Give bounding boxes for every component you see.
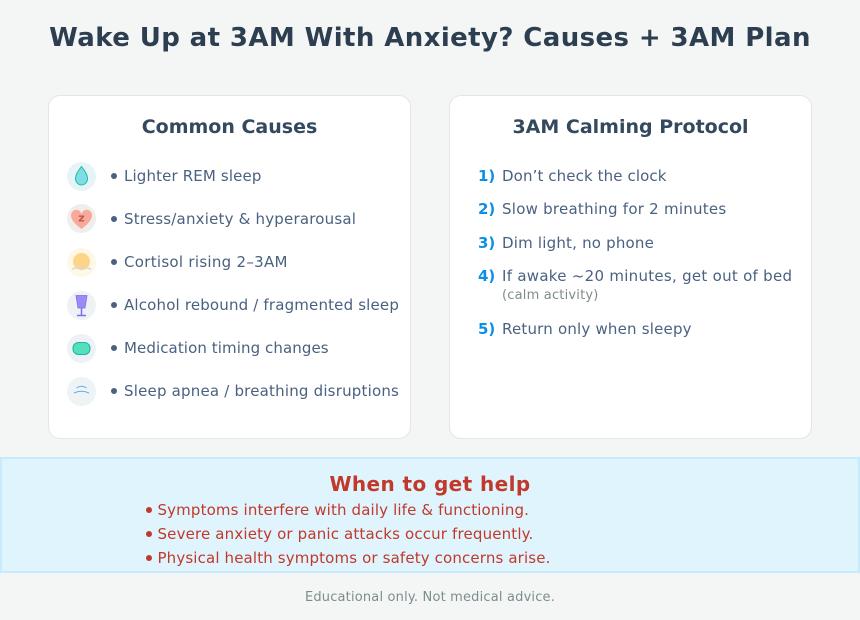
icon: water drop: [67, 162, 96, 191]
icon: wine glass: [67, 291, 96, 320]
cause: medication: Medication timing changes: [124, 339, 329, 357]
heading: calming protocol: 3AM Calming Protocol: [512, 116, 749, 138]
heading: common causes: Common Causes: [142, 116, 317, 138]
cause: lighter REM sleep: Lighter REM sleep: [124, 167, 262, 185]
step 3: Dim light, no phone: [502, 234, 654, 252]
panel: calming protocol: [449, 95, 812, 439]
cause: stress: Stress/anxiety & hyperarousal: [124, 210, 356, 228]
cause: alcohol: Alcohol rebound / fragmented sleep: [124, 296, 399, 314]
icon: heart with Z: z: [78, 212, 85, 224]
help item 3: Physical health symptoms or safety concerns arise.: [158, 549, 551, 567]
icon: breathing arcs: [67, 377, 96, 406]
step 1: 1): [478, 167, 495, 185]
icon: heart with Z: [67, 204, 96, 233]
cause: sleep apnea: Sleep apnea / breathing disruptions: [124, 382, 399, 400]
cause: cortisol: Cortisol rising 2–3AM: [124, 253, 288, 271]
panel: common causes: [48, 95, 411, 439]
footer disclaimer: Educational only. Not medical advice.: [305, 590, 555, 605]
step 1: Don’t check the clock: [502, 167, 667, 185]
icon: rising sun: [67, 248, 96, 277]
step 3: 3): [478, 234, 495, 252]
step 5: Return only when sleepy: [502, 320, 692, 338]
icon: pill: [67, 334, 96, 363]
help item 2: Severe anxiety or panic attacks occur frequently.: [158, 525, 533, 543]
step 4 note: (calm activity): [502, 288, 599, 303]
title: Wake Up at 3AM With Anxiety? Causes + 3AM Plan: [49, 23, 811, 53]
help item 1: Symptoms interfere with daily life & functioning.: [158, 501, 529, 519]
step 4: If awake ~20 minutes, get out of bed: [502, 267, 792, 285]
step 4: 4): [478, 267, 495, 285]
step 2: Slow breathing for 2 minutes: [502, 200, 726, 218]
panel: when to get help: [0, 457, 860, 573]
step 5: 5): [478, 320, 495, 338]
heading: when to get help: When to get help: [329, 472, 531, 496]
step 2: 2): [478, 200, 495, 218]
